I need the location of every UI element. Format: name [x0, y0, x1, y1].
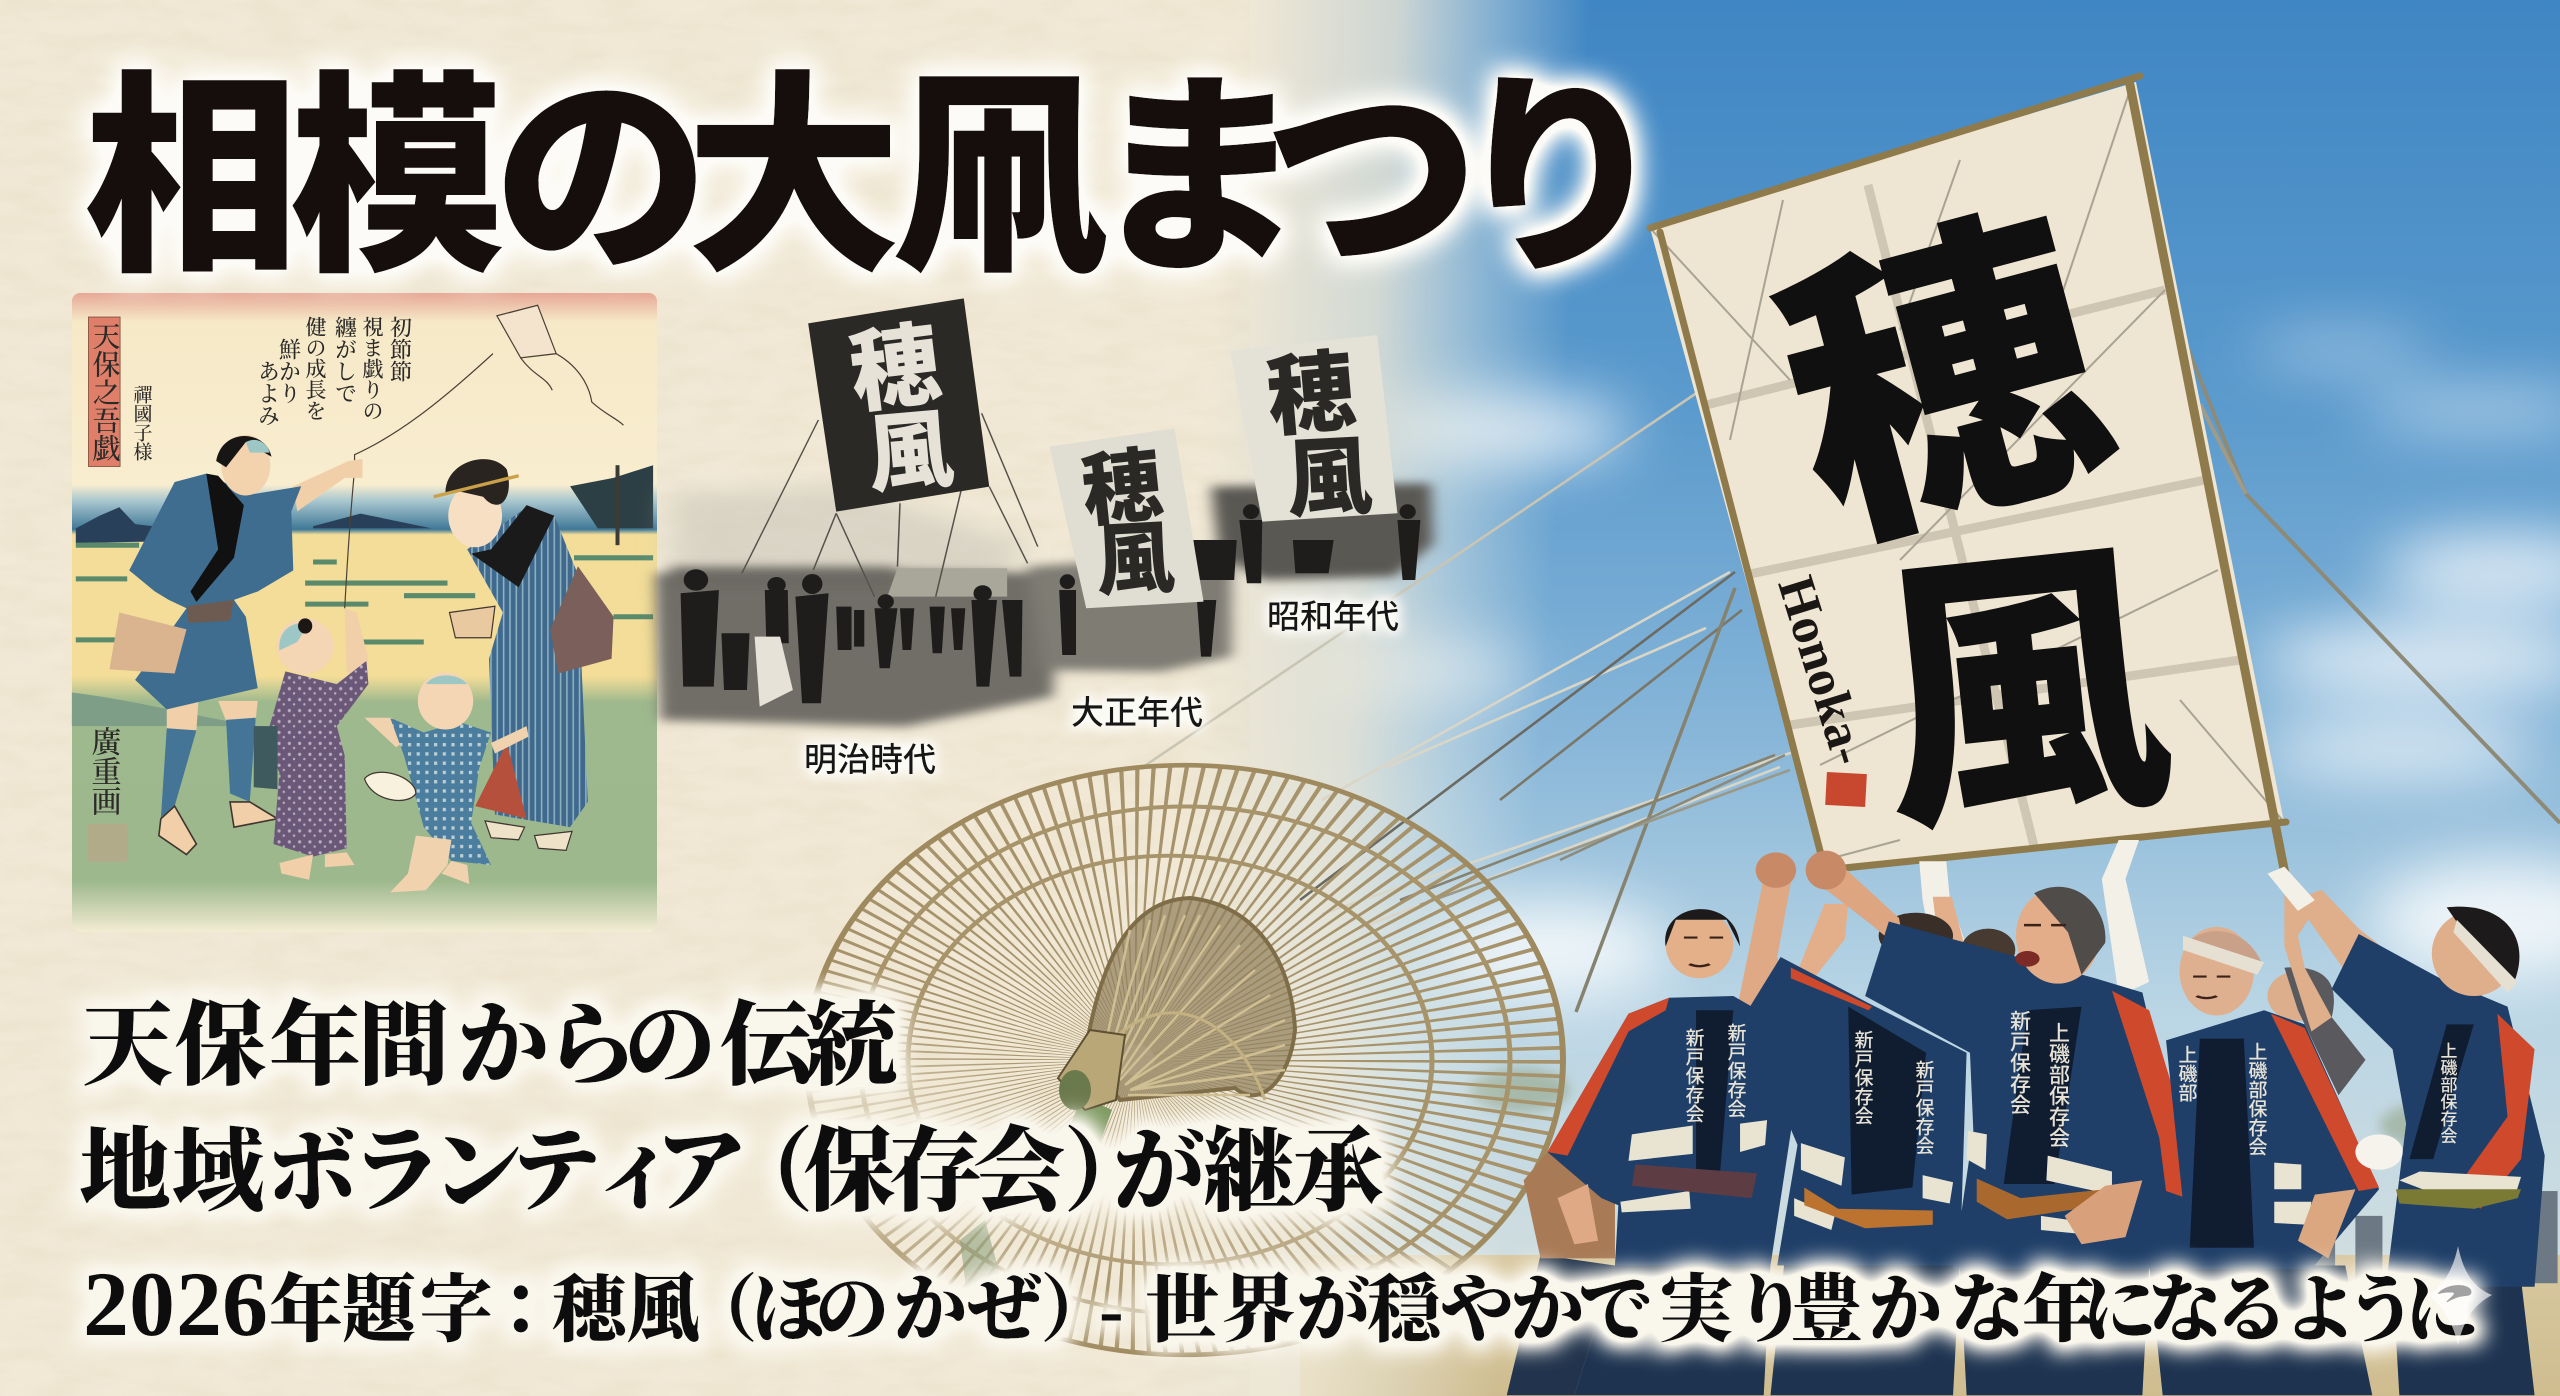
parchment: [0, 0, 1600, 1396]
happi lettering: 新戸保存会: [1724, 1023, 1746, 1118]
kite and string: [345, 305, 623, 608]
photo vignettes: [670, 487, 1017, 580]
inscription: 初節節: [388, 316, 412, 382]
mother: [434, 459, 614, 850]
era label: Showa: 昭和年代: [1267, 598, 1399, 635]
kite photos: [808, 298, 989, 512]
fade of umbrella behind text: [760, 1050, 1400, 1260]
happi lettering: 新戸保存会: [1912, 1060, 1934, 1155]
clouds: [1310, 340, 2560, 1000]
bamboo frame: [1650, 76, 2296, 930]
guy lines: [742, 413, 1038, 597]
kite romaji: Honoka-: [1766, 570, 1878, 772]
member 3: centre: [1806, 851, 2190, 1269]
umbrella frame: bamboo wheel: [760, 765, 1563, 1355]
happi lettering: 新戸保存会: [1852, 1030, 1873, 1125]
kite strings: [1143, 306, 2560, 1012]
happi lettering: 新戸保存会: [1682, 1028, 1704, 1123]
subtitle line 3: 2026: [83, 1253, 268, 1355]
Meiji kite lettering: 風: [864, 402, 957, 505]
right guy line: [2171, 306, 2560, 823]
handle: [960, 1030, 1125, 1320]
inscription: 視ま戯りの: [360, 316, 384, 421]
older child: [254, 608, 368, 880]
member 4: [2149, 927, 2379, 1269]
happi lettering: [1682, 1010, 2457, 1156]
red seal: [1825, 772, 1867, 807]
print background: [72, 293, 657, 932]
main kite: [1650, 76, 2296, 930]
inscription: 禪國子様: [130, 385, 152, 461]
happi lettering: 新戸保存会: [2008, 1010, 2031, 1115]
Taisho kite lettering: 穂: [1078, 440, 1167, 537]
subtitle line 3: 年題字：穂風（ほのかぜ）- 世界が穏やかで実り豊かな年になるように: [269, 1270, 2479, 1352]
sparkle: [2428, 1246, 2492, 1345]
ground: [1300, 1255, 2560, 1396]
subtitle line 2: 地域ボランティア（保存会）が継承: [79, 1121, 1384, 1223]
kite sail: [1650, 82, 2284, 870]
kite kanji 穂: 穂: [1751, 177, 2140, 592]
artist signature: 廣重画: [86, 726, 120, 816]
Showa kite lettering: 穂: [1263, 341, 1359, 448]
battens and folds: [1706, 185, 2240, 850]
Meiji kite lettering: [845, 315, 957, 505]
younger child: [364, 672, 529, 892]
inscription: 健の成長を: [303, 316, 327, 421]
era label: Meiji: 明治時代: [804, 741, 936, 778]
inscription: [130, 316, 412, 461]
background people and back arms: [1507, 840, 2558, 1395]
seal: [88, 824, 127, 862]
subtitle line 1: 天保年間からの伝統: [82, 995, 904, 1097]
spokes and rings: [807, 765, 1563, 1355]
happi lettering: 上磯部保存会: [2046, 1022, 2070, 1148]
era label: Taisho: 大正年代: [1071, 694, 1203, 731]
happi lettering: 上磯部: [2176, 1045, 2197, 1102]
trousers: [1574, 1266, 2535, 1395]
title: 相模の大凧まつり: [84, 58, 1668, 299]
inscription: 纏がしで: [332, 316, 358, 404]
Meiji kite lettering: 穂: [845, 315, 946, 425]
kite kanji 風: 風: [1864, 521, 2181, 867]
happi lettering: 上磯部保存会: [2246, 1042, 2267, 1156]
Taisho kite lettering: 風: [1094, 514, 1176, 606]
member 5: right: [2267, 867, 2545, 1287]
happi lettering: 上磯部保存会: [2438, 1042, 2457, 1144]
inscription: 鮮かり: [276, 338, 302, 404]
Showa kite lettering: [1263, 341, 1374, 529]
landscape details: [72, 465, 653, 726]
figures: [1507, 840, 2558, 1395]
Taisho kite lettering: [1078, 440, 1176, 606]
hub basket: [1085, 898, 1295, 1100]
member 1: left: [1547, 852, 1798, 1266]
ukiyo-e panel: Tenpo era family flying a kite: [72, 293, 657, 932]
cartouche: [88, 317, 120, 466]
father: [109, 435, 362, 855]
crowd silhouettes: [681, 504, 1420, 703]
member 2: [1743, 957, 1967, 1266]
distant trees: [1470, 1068, 2500, 1149]
hall building: [887, 568, 1007, 597]
inscription: あよみ: [256, 360, 280, 426]
historic photographs: [655, 298, 1433, 778]
cartouche title: 天保之吾戯: [88, 322, 120, 462]
Showa kite lettering: 風: [1284, 430, 1374, 529]
group of festival members: [1507, 840, 2558, 1395]
